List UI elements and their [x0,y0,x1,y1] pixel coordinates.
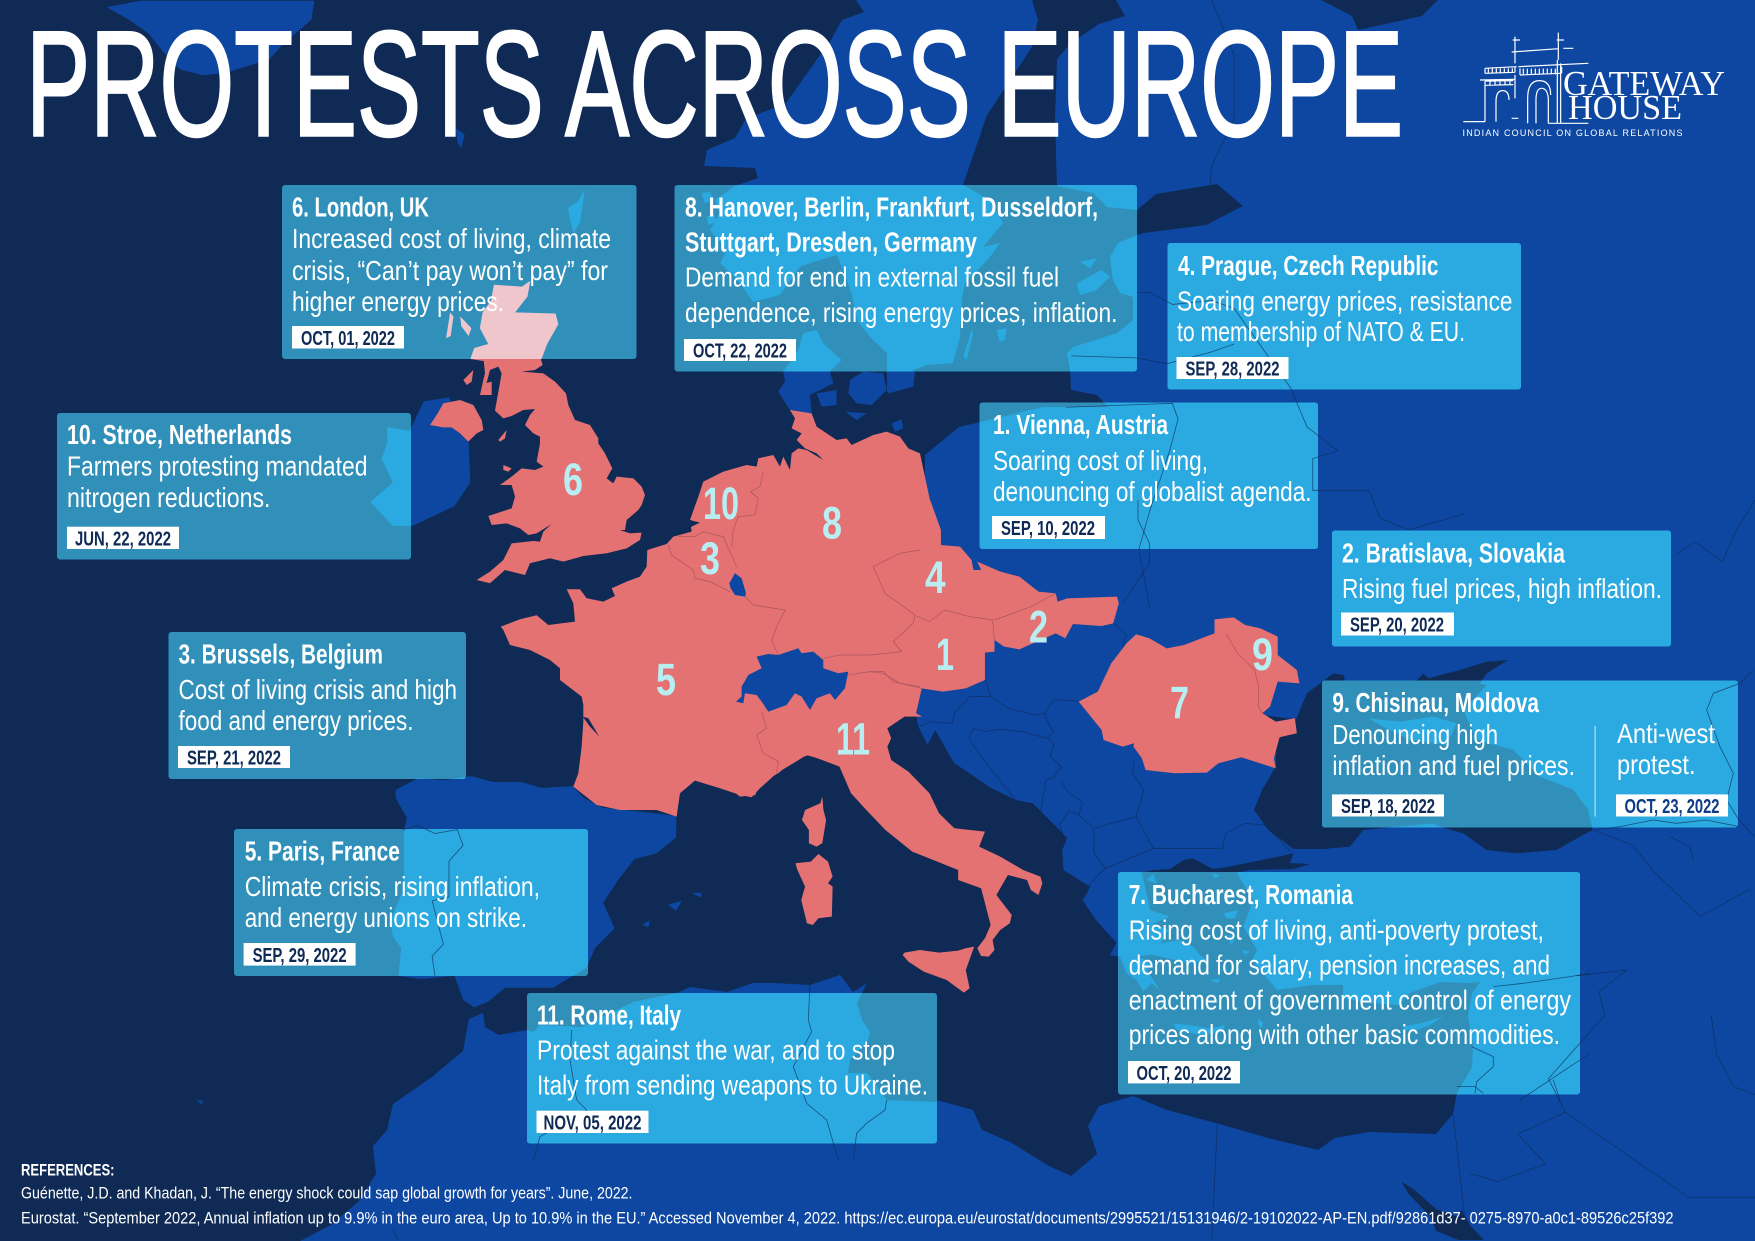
map number labels: 10 [703,478,739,529]
map: Switzerland, Luxembourg and coastal inlets [583,520,848,737]
references: REFERENCES: [21,1162,114,1180]
panel: 3 Brussels: SEP, 21, 2022 [187,746,281,770]
map number labels: 8 [822,498,842,549]
info panels backdrop: semi-transparent look over map [57,185,1738,1144]
panel: 8 Germany: dependence, rising energy prices, inflation. [685,297,1118,328]
panel: 9 Chisinau [1322,680,1738,828]
panel: 11 Rome: Protest against the war, and to stop [537,1035,895,1066]
icon: Gateway of India line drawing [1463,33,1588,123]
panel: 5 Paris: and energy unions on strike. [245,902,527,933]
panel: 3 Brussels: Cost of living crisis and high [178,674,457,705]
map number labels: 6 [563,454,583,505]
panel: 8 Germany: OCT, 22, 2022 [693,340,787,362]
panel: 11 Rome: Italy from sending weapons to Ukraine. [537,1070,928,1100]
panel: 6 London: OCT, 01, 2022 [301,327,395,350]
panel: 1 Vienna [980,402,1318,549]
logo: Gateway House: HOUSE [1568,88,1682,127]
panel: 4 Prague: 4. Prague, Czech Republic [1178,250,1438,281]
panel: 7 Bucharest: 7. Bucharest, Romania [1129,879,1354,910]
panel: 6 London: higher energy prices. [292,286,504,317]
panel: 6 London: crisis, “Can’t pay won’t pay” for [292,255,608,286]
panel: 4 Prague: SEP, 28, 2022 [1186,358,1280,380]
panel: 9 Chisinau: SEP, 18, 2022 [1341,795,1435,818]
panel: 9 Chisinau: OCT, 23, 2022 [1624,795,1720,818]
panel: 7 Bucharest: demand for salary, pension increases, and [1129,950,1550,981]
logo: Gateway House [1462,33,1725,138]
references: Guénette, J.D. and Khadan, J. “The energy shock could sap global growth for years”. June, 2022. [21,1184,632,1202]
panel: 6 London: Increased cost of living, climate [292,223,611,254]
panel: 2 Bratislava: SEP, 20, 2022 [1350,614,1444,636]
panel: 11 Rome [527,993,937,1144]
panel: 7 Bucharest: Rising cost of living, anti-poverty protest, [1129,914,1544,946]
panel: 5 Paris [234,829,588,976]
panel: 6 London: 6. London, UK [292,192,429,223]
panel: 3 Brussels: food and energy prices. [178,705,414,736]
references [21,1162,1674,1227]
map number labels: 5 [656,654,676,705]
panel: 8 Germany [674,185,1137,372]
panel: 5 Paris: Climate crisis, rising inflation, [245,871,540,902]
panel: 8 Germany: Stuttgart, Dresden, Germany [685,226,978,258]
logo: Gateway House: INDIAN COUNCIL ON GLOBAL RELATIONS [1462,128,1682,138]
panel: 7 Bucharest: OCT, 20, 2022 [1136,1062,1232,1085]
panel: 4 Prague [1168,243,1521,390]
map number labels: 4 [925,552,946,603]
panel: 2 Bratislava: Rising fuel prices, high inflation. [1342,573,1662,604]
map number labels: 2 [1029,602,1048,653]
map: country borders between highlighted countries [668,472,1262,773]
map number labels: 7 [1170,677,1189,728]
panel: 7 Bucharest: enactment of government control of energy [1129,984,1571,1016]
panel: 9 Chisinau: inflation and fuel prices. [1332,750,1575,781]
panel: 2 Bratislava [1332,530,1671,646]
panel: 9 Chisinau: Anti-west [1617,718,1715,749]
panel: 5 Paris: 5. Paris, France [245,835,400,866]
panel: 4 Prague: to membership of NATO & EU. [1177,316,1465,347]
panel: 1 Vienna: denouncing of globalist agenda. [993,476,1312,507]
panel: 11 Rome: NOV, 05, 2022 [544,1112,642,1134]
map number labels: 11 [836,713,870,764]
panel: 7 Bucharest [1118,872,1580,1094]
panel: 1 Vienna: SEP, 10, 2022 [1001,517,1095,540]
map number labels: 9 [1252,629,1273,680]
panel: 9 Chisinau: 9. Chisinau, Moldova [1332,687,1540,718]
panel: 10 Stroe [57,413,411,560]
panel: 5 Paris: SEP, 29, 2022 [253,944,347,967]
panel: 3 Brussels [168,632,466,779]
panel: 9 Chisinau: protest. [1617,749,1696,780]
panel: 4 Prague: Soaring energy prices, resistance [1177,285,1512,316]
panel: 2 Bratislava: 2. Bratislava, Slovakia [1342,538,1566,569]
panel: 10 Stroe: nitrogen reductions. [67,482,270,513]
panel: 3 Brussels: 3. Brussels, Belgium [178,638,383,670]
panel: 1 Vienna: Soaring cost of living, [993,445,1208,476]
map number labels: 1 [936,629,954,680]
panel: 1 Vienna: 1. Vienna, Austria [993,409,1169,440]
logo wordmark: GATEWAY [1563,64,1725,103]
panel: 10 Stroe: JUN, 22, 2022 [75,528,171,550]
panel: 10 Stroe: 10. Stroe, Netherlands [67,419,292,450]
map number labels: 3 [700,533,720,584]
panel: 6 London [282,185,636,359]
panel: 11 Rome: 11. Rome, Italy [537,1000,682,1030]
panel: 10 Stroe: Farmers protesting mandated [67,451,368,482]
panel: 8 Germany: Demand for end in external fossil fuel [685,262,1059,293]
panel: 8 Germany: 8. Hanover, Berlin, Frankfurt, Dusseldorf, [685,192,1098,223]
panel: 9 Chisinau: Denouncing high [1332,719,1498,750]
map: protest countries highlighted [430,281,1300,993]
map number labels [563,454,1273,764]
panel: 7 Bucharest: prices along with other basic commodities. [1129,1019,1560,1050]
